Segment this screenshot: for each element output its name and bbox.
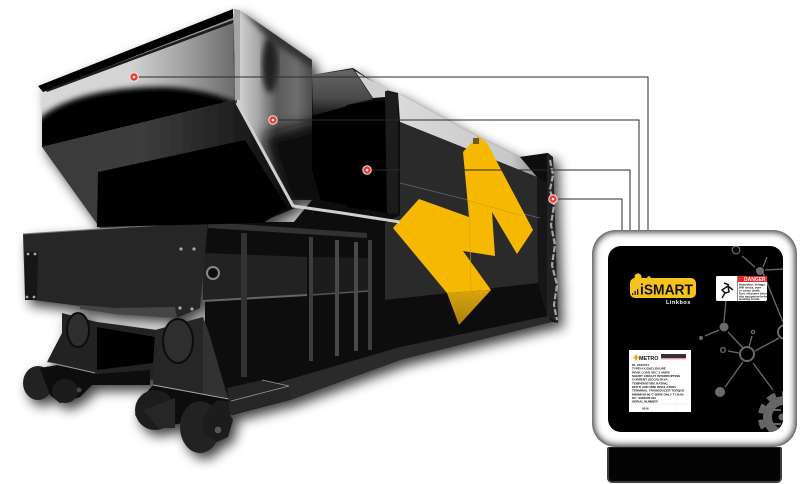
rating label: PEAK LOAD SEC 3 AMPS — [632, 370, 670, 374]
hopper edge trim — [237, 103, 400, 222]
callout line 1 — [134, 77, 648, 230]
rating label: DC: 0000000 NO — [632, 396, 656, 400]
callout line 2 — [273, 120, 639, 230]
SMART logo — [630, 273, 696, 298]
base block under panel — [607, 447, 782, 483]
roof strip — [398, 93, 548, 180]
port fitting — [207, 267, 219, 279]
rating label: CURRENT (SCCR) 5KVA — [632, 378, 668, 382]
hopper side panel — [237, 8, 340, 210]
rear body silhouette — [205, 68, 558, 415]
danger label: working inside. — [738, 297, 760, 301]
rating label: HL 2532704 — [632, 363, 649, 367]
yellow M logo — [393, 136, 533, 325]
rating label: MINIMUM 90°C WIRE ONLY 7 LB-IN — [632, 392, 684, 396]
callout marker 4 — [549, 195, 557, 203]
rail — [270, 316, 552, 400]
rating label: MULTI AND MINI INSULATION — [632, 385, 676, 389]
hopper front face — [38, 22, 240, 160]
danger label: Turn off power before — [739, 292, 769, 296]
danger label: this equipment before — [739, 294, 770, 298]
panel: SMART Linkbox — [592, 230, 797, 447]
end gate — [547, 153, 558, 323]
hopper top rail — [38, 9, 240, 100]
callout marker 3 — [363, 166, 371, 174]
side panel of body — [385, 122, 538, 300]
rating label — [629, 350, 691, 412]
rating label: SERIAL NUMBER — [632, 400, 658, 404]
left leg and wheels — [23, 313, 157, 403]
callout line 4 — [553, 199, 622, 230]
network graphic — [699, 246, 792, 397]
danger label — [716, 276, 770, 301]
Linkbox label: Linkbox — [666, 300, 691, 306]
danger label: or cause death. — [739, 288, 760, 292]
right leg and wheels — [135, 317, 233, 453]
rating label: SHORT CIRCUIT INTERRUPTING — [632, 374, 681, 378]
front frame panel — [23, 222, 208, 318]
hopper lower section — [42, 100, 295, 228]
callout line 3 — [367, 170, 630, 230]
tail bracket — [227, 380, 290, 415]
callout marker 2 — [269, 116, 277, 124]
lower body — [385, 283, 550, 347]
rating label: TERMINAL TRANSDUCER TORQUE — [632, 389, 684, 393]
compactor machine — [23, 8, 558, 453]
body seam — [400, 183, 540, 218]
compactor illustration — [18, 6, 648, 468]
SMART logo: iSMART — [640, 282, 693, 298]
gear icon — [760, 394, 800, 440]
rating label: METRO — [639, 356, 658, 362]
danger label: Will shock, burn — [739, 286, 762, 290]
rating label: 0016 — [642, 406, 649, 410]
danger label: Hazardous Voltage. — [739, 282, 766, 286]
rating label: TEMPERATURE RATING — [632, 381, 668, 385]
danger label: DANGER — [744, 277, 766, 283]
rating label: TYPE/4 X ENCLOSURE — [632, 367, 666, 371]
frame bay with posts — [203, 222, 400, 395]
callout marker 1 — [130, 73, 138, 81]
